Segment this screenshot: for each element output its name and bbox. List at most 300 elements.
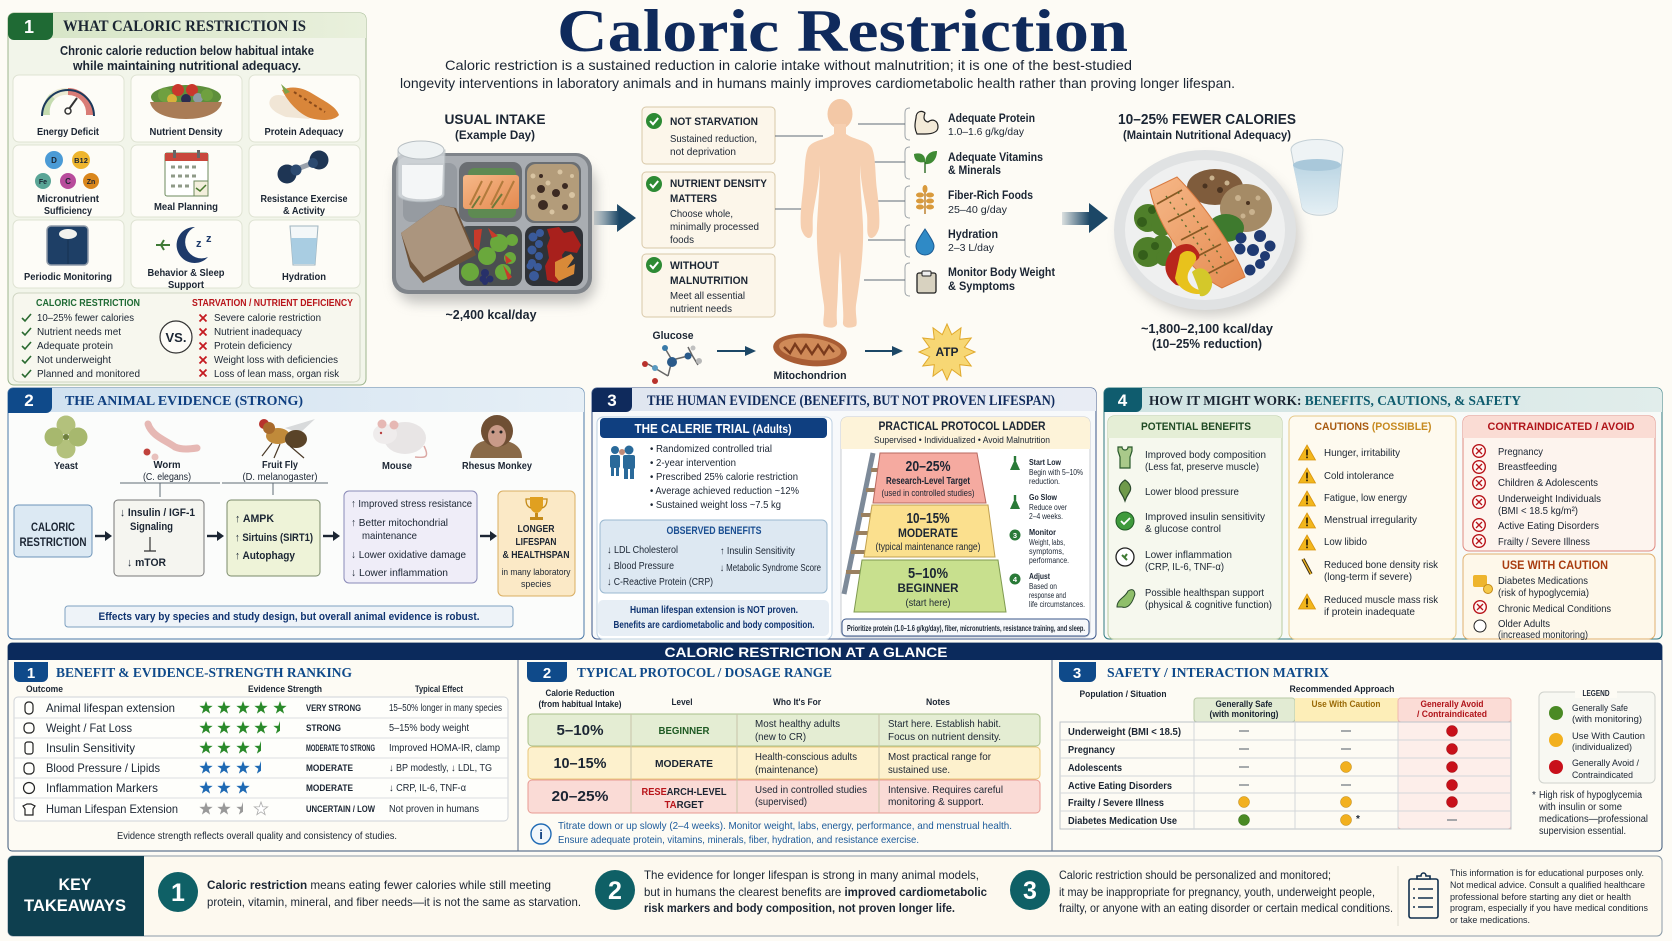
callout: nutrient density matters: foods xyxy=(670,235,694,246)
callout: nutrient density matters xyxy=(642,172,775,248)
legend: (with monitoring) xyxy=(1572,714,1642,725)
rung: 5-10%: 5–10% xyxy=(908,566,948,582)
safety footnote xyxy=(1532,790,1648,837)
rung: 20-25%: Research-Level Target xyxy=(886,475,970,487)
card: micronutrient sufficiency xyxy=(13,145,124,217)
step notes: response and xyxy=(1029,591,1066,600)
takeaway 3: frailty, or anyone with an eating disorder or certain medical conditions. xyxy=(1059,901,1393,915)
protocol info note: i xyxy=(539,827,543,842)
organism: mouse: Mouse xyxy=(382,460,412,472)
callout: not starvation: NOT STARVATION xyxy=(670,116,758,128)
card: behavior and sleep: Support xyxy=(168,279,204,291)
panel 3 header xyxy=(592,388,1096,412)
card: micronutrient sufficiency: Fe xyxy=(39,179,47,186)
icon: trophy xyxy=(526,497,547,520)
reduced intake heading: (Maintain Nutritional Adequacy) xyxy=(1123,128,1291,142)
nutrient list: Monitor Body Weight xyxy=(948,267,1055,279)
organism: rhesus monkey xyxy=(462,415,532,472)
panel 2: animal evidence xyxy=(8,388,584,639)
ranking heading: BENEFIT & EVIDENCE-STRENGTH RANKING xyxy=(56,666,352,681)
flow: AMPK sirtuins autophagy xyxy=(227,500,320,576)
protocol table: Used in controlled studies xyxy=(755,784,867,796)
column: potential benefits: Lower inflammation xyxy=(1145,549,1232,561)
reduced intake heading: 10–25% FEWER CALORIES xyxy=(1118,112,1296,128)
protocol table: Most practical range for xyxy=(888,751,991,763)
callout: without malnutrition: MALNUTRITION xyxy=(670,275,748,287)
card: nutrient density xyxy=(131,75,242,142)
observed benefits: ↑ Insulin Sensitivity xyxy=(720,546,795,557)
card: hydration: Hydration xyxy=(282,271,326,283)
card: resistance exercise: & Activity xyxy=(283,205,325,217)
nutrient list: Adequate Protein xyxy=(948,113,1035,125)
CALERIE trial card: • Average achieved reduction ~12% xyxy=(650,485,799,497)
flow: longer lifespan: LONGER xyxy=(518,523,555,535)
protocol heading: TYPICAL PROTOCOL / DOSAGE RANGE xyxy=(577,666,832,681)
ranking section: Evidence Strength xyxy=(248,684,322,695)
comparison: CR vs starvation: Planned and monitored xyxy=(37,368,140,380)
card: hydration xyxy=(249,220,360,288)
card: protein adequacy xyxy=(249,75,360,142)
nutrient list: 1.0–1.6 g/kg/day xyxy=(948,126,1025,138)
flow: caloric restriction xyxy=(14,505,92,557)
ranking table: MODERATE TO STRONG xyxy=(306,743,375,753)
step notes: Reduce over xyxy=(1029,503,1067,512)
flow: downstream effects: ↓ Lower inflammation xyxy=(351,567,448,579)
card: meal planning: Meal Planning xyxy=(154,201,218,213)
flow: downstream effects: ↑ Improved stress resistance xyxy=(351,498,472,510)
rung: 5-10% xyxy=(854,560,1006,612)
ranking table: Weight / Fat Loss xyxy=(46,721,132,735)
reduced intake heading xyxy=(1118,112,1296,142)
organism: worm: Worm xyxy=(154,459,180,471)
column: cautions: Hunger, irritability xyxy=(1324,447,1401,459)
card: resistance exercise: Resistance Exercise xyxy=(260,193,348,205)
icon: bone xyxy=(1303,559,1311,574)
protocol section: Level xyxy=(672,697,692,707)
column: use with caution xyxy=(1463,554,1655,641)
organism: yeast: Yeast xyxy=(54,460,78,472)
column: potential benefits xyxy=(1108,416,1282,639)
ladder rails xyxy=(844,453,879,594)
intro text: Caloric restriction is a sustained reduction in calorie intake without malnutrition; it is one of the best-studied xyxy=(445,57,1132,73)
mitochondrion: Mitochondrion xyxy=(774,370,847,382)
key takeaways label: TAKEAWAYS xyxy=(24,896,126,915)
flow: longer lifespan: & HEALTHSPAN xyxy=(502,549,570,561)
ranking table xyxy=(14,697,508,821)
card: protein adequacy: Protein Adequacy xyxy=(264,126,344,138)
comparison: CR vs starvation xyxy=(13,293,360,382)
ranking table: ↓ BP modestly, ↓ LDL, TG xyxy=(389,763,492,774)
protocol table: Focus on nutrient density. xyxy=(888,731,1001,743)
rung: 20-25%: (used in controlled studies) xyxy=(882,488,974,499)
rung: 5-10%: (start here) xyxy=(906,598,950,609)
disclaimer xyxy=(1450,868,1648,926)
at a glance banner: CALORIC RESTRICTION AT A GLANCE xyxy=(664,644,948,660)
nutrient list: & Symptoms xyxy=(948,281,1015,293)
legend: Contraindicated xyxy=(1572,770,1633,781)
legend: (individualized) xyxy=(1572,742,1632,753)
nutrient list xyxy=(914,111,1055,293)
card: micronutrient sufficiency: Zn xyxy=(87,179,95,186)
callout: nutrient density matters: MATTERS xyxy=(670,193,717,205)
takeaway 2: but in humans the clearest benefits are improved cardiometabolic xyxy=(644,885,987,899)
organism: mouse xyxy=(373,420,427,472)
protocol table: MODERATE xyxy=(655,758,713,770)
takeaway 1 xyxy=(158,872,581,912)
flow: downstream effects xyxy=(344,491,477,583)
takeaway 2: The evidence for longer lifespan is strong in many animal models, xyxy=(644,868,979,882)
observed benefits: ↓ LDL Cholesterol xyxy=(607,545,678,556)
usual intake heading: (Example Day) xyxy=(455,128,535,142)
takeaway 2: risk markers and body composition, not proven longer life. xyxy=(644,901,955,915)
ranking table: STRONG xyxy=(306,723,341,733)
callout: without malnutrition: WITHOUT xyxy=(670,260,719,272)
safety matrix table: Active Eating Disorders xyxy=(1068,780,1172,792)
protocol table: (new to CR) xyxy=(755,731,806,743)
card: micronutrient sufficiency: B12 xyxy=(74,156,88,165)
panel 1 header xyxy=(8,13,366,40)
column: contraindicated: Active Eating Disorders xyxy=(1498,520,1599,532)
column: potential benefits: (CRP, IL-6, TNF-α) xyxy=(1145,561,1224,573)
flow: longer lifespan: species xyxy=(521,579,551,590)
ranking table: 15–50% longer in many species xyxy=(389,703,502,714)
column: use with caution: Chronic Medical Conditions xyxy=(1498,603,1611,615)
card: periodic monitoring: Periodic Monitoring xyxy=(24,271,112,283)
takeaway 3: Caloric restriction should be personalized and monitored; xyxy=(1059,868,1331,882)
card: behavior and sleep: z xyxy=(206,233,212,245)
protocol info note: Ensure adequate protein, vitamins, minerals, fiber, hydration, and resistance exercise. xyxy=(558,834,919,846)
ranking section xyxy=(14,662,508,842)
panel 1 header: WHAT CALORIC RESTRICTION IS xyxy=(63,18,306,35)
callout: nutrient density matters: NUTRIENT DENSITY xyxy=(670,178,768,190)
mitochondrion xyxy=(772,330,848,382)
panel 3 header: THE HUMAN EVIDENCE (BENEFITS, BUT NOT PROVEN LIFESPAN) xyxy=(647,393,1055,409)
ranking table: MODERATE xyxy=(306,763,353,773)
panel 4 header: 4 xyxy=(1118,391,1128,410)
practical protocol ladder: PRACTICAL PROTOCOL LADDER xyxy=(878,421,1046,433)
reduced intake calories xyxy=(1141,321,1274,351)
panel 4 header xyxy=(1104,388,1662,412)
icon: shirt xyxy=(1118,447,1132,468)
step notes: 2–4 weeks. xyxy=(1029,512,1063,521)
callout: not starvation xyxy=(642,107,775,164)
observed benefits xyxy=(600,520,827,593)
safety matrix table: Underweight (BMI < 18.5) xyxy=(1068,726,1181,738)
panel 2 header xyxy=(8,388,584,413)
column: contraindicated: Breastfeeding xyxy=(1498,461,1557,473)
panel 4 header: HOW IT MIGHT WORK: BENEFITS, CAUTIONS, & SAFETY xyxy=(1149,394,1521,409)
observed benefits: OBSERVED BENEFITS xyxy=(666,525,762,537)
nutrient list: 2–3 L/day xyxy=(948,242,995,254)
step notes: Begin with 5–10% xyxy=(1029,468,1083,477)
CALERIE trial card: THE CALERIE TRIAL (Adults) xyxy=(634,421,792,436)
safety matrix table: Generally Safe xyxy=(1216,699,1272,709)
panel 1: what caloric restriction is xyxy=(8,13,366,385)
flow: insulin signaling: ↓ mTOR xyxy=(127,557,166,569)
practical protocol ladder: Supervised • Individualized • Avoid Malnutrition xyxy=(874,435,1050,446)
comparison: CR vs starvation: CALORIC RESTRICTION xyxy=(36,298,140,309)
takeaway 3: it may be inappropriate for pregnancy, youth, underweight people, xyxy=(1059,885,1375,899)
flow: insulin signaling: ↓ Insulin / IGF-1 xyxy=(120,507,195,519)
column: contraindicated: Frailty / Severe Illness xyxy=(1498,536,1590,548)
ranking table: Not proven in humans xyxy=(389,804,479,815)
observed benefits: ↓ Blood Pressure xyxy=(607,561,674,572)
flow: insulin signaling xyxy=(114,500,204,576)
arrow: toward reduced plate xyxy=(1062,203,1108,233)
column: use with caution: USE WITH CAUTION xyxy=(1502,560,1608,572)
icon: healthspan xyxy=(1117,590,1135,607)
observed benefits: ↓ Metabolic Syndrome Score xyxy=(720,563,821,574)
protocol table: Most healthy adults xyxy=(755,718,840,730)
safety footnote: with insulin or some xyxy=(1538,802,1622,813)
icon: people xyxy=(610,446,635,479)
glucose molecule: Glucose xyxy=(652,330,694,342)
note: human lifespan: Benefits are cardiometabolic and body composition. xyxy=(614,619,815,631)
icon: weighing clipboard xyxy=(917,271,936,293)
callout: not starvation: Sustained reduction, xyxy=(670,134,757,145)
observed benefits: ↓ C-Reactive Protein (CRP) xyxy=(607,577,713,588)
note: human lifespan: Human lifespan extension is NOT proven. xyxy=(630,604,798,616)
arrow xyxy=(323,531,340,541)
step notes: life circumstances. xyxy=(1029,600,1085,609)
ATP burst: ATP xyxy=(935,345,959,359)
arrow xyxy=(95,531,112,541)
takeaway 1: protein, vitamin, mineral, and fiber needs—it is not the same as starvation. xyxy=(207,895,581,909)
step notes: Start Low xyxy=(1029,458,1062,467)
card: energy deficit: Energy Deficit xyxy=(37,126,99,138)
safety matrix table: (with monitoring) xyxy=(1210,709,1278,719)
rung: 10-15%: (typical maintenance range) xyxy=(876,542,980,553)
CALERIE trial card: • Sustained weight loss ~7.5 kg xyxy=(650,499,781,511)
flow: downstream effects: ↑ Better mitochondrial xyxy=(351,517,448,529)
comparison: CR vs starvation: Nutrient inadequacy xyxy=(214,326,303,338)
safety matrix table: Frailty / Severe Illness xyxy=(1068,797,1164,809)
card: micronutrient sufficiency: Sufficiency xyxy=(44,205,92,217)
column: cautions: if protein inadequate xyxy=(1324,606,1415,618)
organism: fruit fly: (D. melanogaster) xyxy=(242,472,318,483)
protocol table: 5–10% xyxy=(556,722,604,739)
callout: without malnutrition: nutrient needs xyxy=(670,304,732,315)
comparison: CR vs starvation: Loss of lean mass, organ risk xyxy=(214,368,340,380)
safety heading xyxy=(1059,662,1329,682)
safety matrix section: Population / Situation xyxy=(1080,689,1166,699)
step notes: Monitor xyxy=(1029,528,1056,537)
panel 1 definition: while maintaining nutritional adequacy. xyxy=(72,59,301,73)
card: behavior and sleep: Behavior & Sleep xyxy=(148,267,224,279)
callout: without malnutrition xyxy=(642,254,775,317)
safety footnote: supervision essential. xyxy=(1539,826,1626,837)
step notes: reduction. xyxy=(1029,477,1060,486)
column: use with caution: (increased monitoring) xyxy=(1498,629,1588,641)
protocol section: Who It's For xyxy=(773,697,821,707)
column: contraindicated: Underweight Individuals xyxy=(1498,493,1601,505)
panel 2 header: 2 xyxy=(24,391,34,410)
icon: inflammation xyxy=(1116,548,1134,566)
organism: fruit fly: Fruit Fly xyxy=(262,459,298,471)
protocol table: 20–25% xyxy=(552,788,608,805)
column: cautions xyxy=(1289,416,1456,639)
safety heading: SAFETY / INTERACTION MATRIX xyxy=(1107,666,1329,681)
step notes: Weight, labs, xyxy=(1029,538,1065,547)
column: cautions: (long-term if severe) xyxy=(1324,571,1412,583)
key takeaways label: KEY xyxy=(58,875,92,894)
step notes: 4 xyxy=(1013,575,1018,584)
illustration: usual intake tray xyxy=(392,141,596,303)
ranking table: Insulin Sensitivity xyxy=(46,741,135,755)
card: micronutrient sufficiency: Micronutrient xyxy=(37,193,99,205)
takeaway 3: 3 xyxy=(1023,877,1037,905)
rung: 10-15%: 10–15% xyxy=(906,511,950,527)
callout: nutrient density matters: Choose whole, xyxy=(670,209,733,220)
column: cautions: Cold intolerance xyxy=(1324,470,1394,482)
key takeaways bar xyxy=(8,856,1662,936)
icon: clipboard xyxy=(1409,873,1438,918)
ranking table: Inflammation Markers xyxy=(46,781,158,795)
usual intake heading: USUAL INTAKE xyxy=(444,111,546,127)
ranking table: Improved HOMA-IR, clamp xyxy=(389,743,500,754)
organism: worm xyxy=(143,424,197,483)
note: prioritize protein xyxy=(842,619,1089,636)
intro text xyxy=(400,57,1235,91)
column: use with caution: Diabetes Medications xyxy=(1498,575,1588,587)
column: cautions: Reduced muscle mass risk xyxy=(1324,594,1439,606)
callout: nutrient density matters: minimally processed xyxy=(670,222,759,233)
CALERIE trial card xyxy=(597,417,832,639)
disclaimer: program, especially if you have medical conditions xyxy=(1450,903,1648,914)
note: animal evidence: Effects vary by species and study design, but overall animal evidence is robust. xyxy=(98,611,480,623)
card: resistance exercise xyxy=(249,145,360,217)
nutrient list: Adequate Vitamins xyxy=(948,152,1043,164)
at a glance banner xyxy=(8,643,1662,660)
rung: 10-15%: MODERATE xyxy=(898,526,958,540)
key takeaways label xyxy=(8,856,144,936)
flow: caloric restriction: CALORIC xyxy=(31,522,75,534)
organism: worm: (C. elegans) xyxy=(143,472,191,483)
callout: without malnutrition: Meet all essential xyxy=(670,291,745,302)
protocol table: (maintenance) xyxy=(755,764,818,776)
safety matrix table: Use With Caution xyxy=(1312,699,1380,709)
ranking footnote: Evidence strength reflects overall quality and consistency of studies. xyxy=(117,831,397,842)
comparison: CR vs starvation: Not underweight xyxy=(37,354,111,366)
disclaimer: professional before starting any diet or health xyxy=(1450,892,1631,903)
comparison: CR vs starvation: 10–25% fewer calories xyxy=(37,312,134,324)
reduced intake calories: ~1,800–2,100 kcal/day xyxy=(1141,321,1274,336)
column: contraindicated xyxy=(1463,416,1655,551)
card: behavior and sleep: z xyxy=(196,238,202,250)
column: contraindicated: Children & Adolescents xyxy=(1498,477,1598,489)
panel: at a glance xyxy=(8,643,1662,851)
legend xyxy=(1539,688,1655,783)
nutrient list: 25–40 g/day xyxy=(948,204,1008,216)
safety footnote: medications—professional xyxy=(1539,814,1648,825)
note: animal evidence xyxy=(65,606,513,627)
column: cautions: Low libido xyxy=(1324,536,1367,548)
column: cautions: CAUTIONS (POSSIBLE) xyxy=(1314,421,1432,433)
flow: longer lifespan: LIFESPAN xyxy=(516,536,556,548)
protocol info note: Titrate down or up slowly (2–4 weeks). Monitor weight, labs, energy, performance, and menstrual health. xyxy=(558,820,1012,832)
column: potential benefits: (physical & cognitive function) xyxy=(1145,599,1272,611)
icon: wheat xyxy=(916,185,934,214)
column: use with caution: (risk of hypoglycemia) xyxy=(1498,587,1589,599)
organism: rhesus monkey: Rhesus Monkey xyxy=(462,460,532,472)
safety footnote: * xyxy=(1532,790,1536,801)
protocol table: BEGINNER xyxy=(658,725,710,737)
rung: 10-15% xyxy=(864,505,995,557)
column: contraindicated: Pregnancy xyxy=(1498,446,1544,458)
ranking section: Typical Effect xyxy=(415,684,464,695)
practical protocol ladder xyxy=(841,417,1090,637)
protocol table: 10–15% xyxy=(554,755,606,772)
step notes: 3 xyxy=(1013,531,1017,540)
panel 2 header: THE ANIMAL EVIDENCE (STRONG) xyxy=(65,394,303,409)
flow: AMPK sirtuins autophagy: ↑ Sirtuins (SIRT1) xyxy=(235,532,313,544)
column: potential benefits: & glucose control xyxy=(1145,523,1221,535)
protocol heading: 2 xyxy=(543,665,551,682)
takeaway 1: 1 xyxy=(171,879,185,907)
card: micronutrient sufficiency: C xyxy=(65,177,71,186)
legend: Generally Safe xyxy=(1572,703,1628,714)
protocol section xyxy=(527,662,1040,846)
arrow xyxy=(480,531,497,541)
comparison: CR vs starvation: Adequate protein xyxy=(37,340,113,352)
ranking table: ↓ CRP, IL-6, TNF-α xyxy=(389,783,466,794)
step notes: performance. xyxy=(1029,556,1069,565)
safety heading: 3 xyxy=(1073,665,1081,682)
protocol table: TARGET xyxy=(664,799,704,811)
ranking table: Human Lifespan Extension xyxy=(46,802,178,816)
flow: longer lifespan xyxy=(498,491,575,596)
column: potential benefits: POTENTIAL BENEFITS xyxy=(1141,421,1251,433)
ranking table: UNCERTAIN / LOW xyxy=(306,804,375,814)
illustration: human body with connectors xyxy=(775,99,910,328)
icon: water glass xyxy=(1291,140,1343,215)
brackets xyxy=(120,483,328,497)
panel 1 definition xyxy=(60,44,314,73)
ranking table: Animal lifespan extension xyxy=(46,701,175,715)
stars row xyxy=(199,701,287,754)
usual intake heading xyxy=(444,111,546,142)
rung: 20-25% xyxy=(873,453,986,503)
comparison: CR vs starvation: Severe calorie restriction xyxy=(214,312,321,324)
comparison: CR vs starvation: VS. xyxy=(166,330,186,345)
arrow: usual to reduced xyxy=(594,204,636,232)
flow: AMPK sirtuins autophagy: ↑ AMPK xyxy=(235,513,274,525)
column: cautions: Reduced bone density risk xyxy=(1324,559,1439,571)
ranking table: VERY STRONG xyxy=(306,703,361,713)
comparison: CR vs starvation: STARVATION / NUTRIENT DEFICIENCY xyxy=(192,298,353,309)
column: potential benefits: Possible healthspan support xyxy=(1145,587,1264,599)
protocol section: Calorie Reduction xyxy=(546,688,614,698)
icon: water drop xyxy=(916,229,934,255)
arrow xyxy=(207,531,224,541)
comparison: CR vs starvation: Nutrient needs met xyxy=(37,326,121,338)
rung: 5-10%: BEGINNER xyxy=(898,581,959,595)
organism: fruit fly xyxy=(242,419,318,483)
protocol table: Health-conscious adults xyxy=(755,751,857,763)
step notes: Based on xyxy=(1029,582,1057,591)
panel 1 header: 1 xyxy=(24,17,34,37)
CALERIE trial card: • Randomized controlled trial xyxy=(650,443,772,455)
protocol table: Intensive. Requires careful xyxy=(888,784,1003,796)
safety matrix section: Recommended Approach xyxy=(1290,684,1394,694)
glucose molecule xyxy=(642,330,702,384)
protocol heading xyxy=(527,662,832,682)
icon: blood pressure xyxy=(1119,480,1131,501)
panel 4: benefits cautions safety xyxy=(1104,388,1662,641)
organism: yeast xyxy=(44,416,88,472)
safety matrix section xyxy=(1059,662,1655,837)
safety matrix table: Pregnancy xyxy=(1068,744,1115,756)
